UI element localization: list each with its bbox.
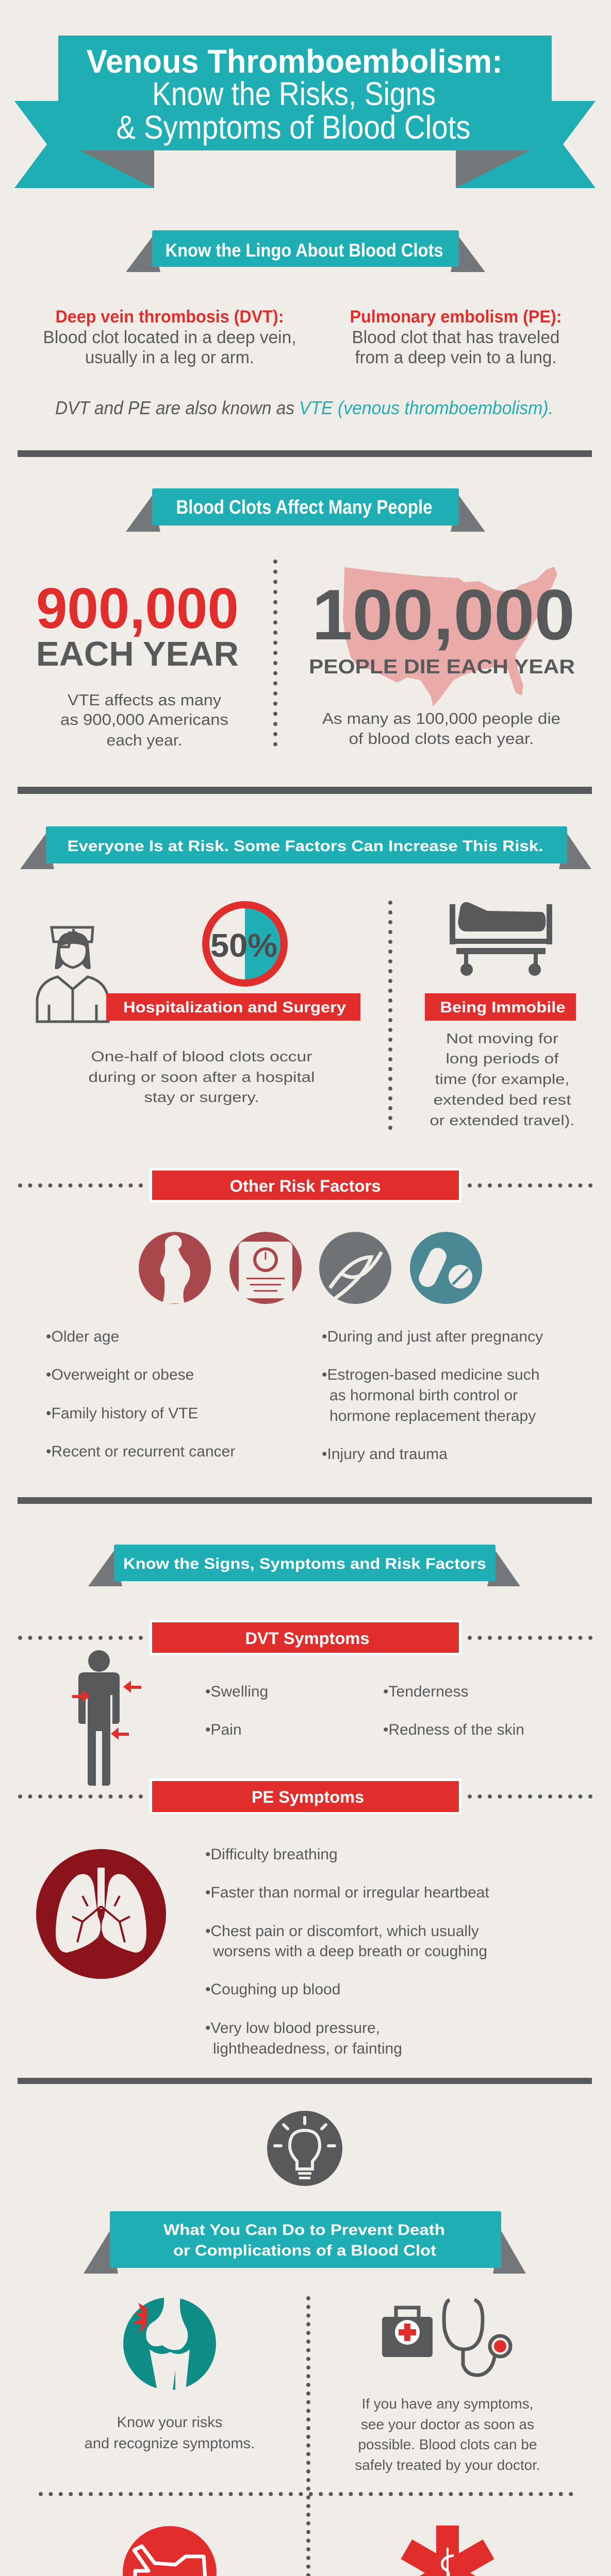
icon: human figure with arrows (72, 1650, 141, 1786)
banner: What You Can Do: or Complications of a Blood Clot (173, 2242, 436, 2259)
panel: being immobile: time (for example, (435, 1071, 569, 1087)
banner: Know the Signs: Know the Signs, Symptoms and Risk Factors (123, 1555, 486, 1572)
icon: 50% circle: 50% (210, 927, 277, 964)
stat: 100,000 with US map: 100,000 (312, 575, 575, 655)
list: DVT symptoms: •Tenderness (383, 1683, 469, 1700)
definition: PE: Pulmonary embolism (PE): (350, 307, 562, 327)
banner: Know the Lingo: Know the Lingo About Blood Clots (165, 240, 443, 261)
icon: pregnancy (139, 1232, 211, 1304)
icon: 50% circle (206, 905, 284, 983)
title ribbon (14, 36, 596, 188)
list: risk factors right (322, 1328, 543, 1463)
panel: see your doctor: possible. Blood clots can be (358, 2436, 537, 2452)
icon: hospital bed (123, 2526, 217, 2576)
icon: scale (229, 1232, 302, 1304)
icon: star of life (401, 2526, 494, 2576)
panel: tell your doctor (356, 2526, 539, 2576)
icon: pills (410, 1232, 482, 1304)
panel: see your doctor: see your doctor as soon as (361, 2416, 534, 2432)
icon: medical kit (382, 2308, 433, 2357)
VTE note: DVT and PE are also known as (55, 397, 294, 418)
label bar (425, 993, 576, 1021)
heading: PE Symptoms (20, 1778, 592, 1814)
icon: knee (123, 2297, 216, 2391)
list: DVT symptoms: •Pain (205, 1721, 242, 1738)
panel: hospitalization and surgery (37, 905, 360, 1105)
heading: DVT Symptoms: DVT Symptoms (245, 1629, 369, 1648)
list: PE symptoms: •Coughing up blood (205, 1981, 340, 1998)
title ribbon: & Symptoms of Blood Clots (117, 109, 470, 146)
panel: know your risks (85, 2297, 255, 2452)
icon: nurse (37, 927, 108, 1022)
icon: DNA (319, 1232, 391, 1304)
icon: US map (343, 567, 557, 706)
definition: DVT: Blood clot located in a deep vein, (43, 328, 296, 347)
definition: DVT: usually in a leg or arm. (85, 348, 254, 367)
heading: Other Risk Factors: Other Risk Factors (230, 1177, 381, 1195)
icon: bed (450, 902, 552, 976)
list: PE symptoms: worsens with a deep breath or coughing (212, 1943, 487, 1960)
list: PE symptoms: •Difficulty breathing (205, 1846, 338, 1863)
list: risk factors right: •Injury and trauma (322, 1446, 448, 1463)
banner: Know the Lingo (126, 230, 485, 272)
list: risk factors right: hormone replacement therapy (329, 1408, 536, 1425)
icons: risk factors (139, 1232, 482, 1304)
panel: being immobile: or extended travel). (430, 1112, 574, 1128)
title ribbon: Know the Risks, Signs (152, 75, 436, 112)
banner: Everyone Is at Risk (20, 826, 591, 869)
panel: hospitalization and surgery: stay or surgery. (144, 1089, 259, 1105)
stat: 900,000: each year. (106, 731, 183, 749)
panel: hospitalization and surgery: One-half of blood clots occur (91, 1048, 312, 1064)
banner: Blood Clots Affect Many People: Blood Clots Affect Many People (176, 497, 432, 518)
list: PE symptoms: •Chest pain or discomfort, which usually (205, 1923, 479, 1940)
list: risk factors left (46, 1328, 235, 1460)
heading: Other Risk Factors (20, 1168, 592, 1202)
icon: lungs (36, 1849, 166, 1979)
list: risk factors left: •Overweight or obese (46, 1366, 194, 1383)
stat: 100,000 with US map: PEOPLE DIE EACH YEAR (309, 656, 575, 678)
list: risk factors left: •Older age (46, 1328, 119, 1345)
panel: being immobile: Not moving for (446, 1030, 558, 1046)
panel: hospitalization and surgery: during or soon after a hospital (89, 1069, 315, 1085)
panel: being immobile: extended bed rest (433, 1092, 571, 1108)
panel: see your doctor (355, 2300, 540, 2473)
list: risk factors right: •During and just after pregnancy (322, 1328, 543, 1345)
banner: Know the Signs (88, 1545, 520, 1586)
stat: 900,000: VTE affects as many (68, 691, 222, 709)
banner: What You Can Do: What You Can Do to Prevent Death (163, 2222, 445, 2239)
label bar (106, 993, 360, 1021)
stat: 900,000: EACH YEAR (36, 635, 239, 673)
definition: DVT: Deep vein thrombosis (DVT): (56, 307, 284, 327)
stat: 100,000 with US map: As many as 100,000 people die (322, 709, 560, 727)
stat: 900,000 (36, 577, 239, 749)
list: PE symptoms: •Very low blood pressure, (205, 2020, 380, 2037)
list: PE symptoms (205, 1846, 489, 2057)
panel: know your risks: Know your risks (117, 2414, 222, 2431)
panel: before surgery (68, 2526, 271, 2576)
panel: being immobile (425, 902, 576, 1128)
list: DVT symptoms: •Redness of the skin (383, 1721, 524, 1738)
stat: 100,000 with US map: of blood clots each year. (349, 730, 534, 748)
definition: DVT (43, 307, 296, 367)
list: DVT symptoms: •Swelling (205, 1683, 268, 1700)
list: risk factors left: •Recent or recurrent cancer (46, 1443, 235, 1460)
banner: What You Can Do (84, 2211, 526, 2274)
VTE note: VTE (venous thromboembolism). (299, 397, 553, 418)
panel: know your risks: and recognize symptoms. (85, 2435, 255, 2452)
definition: PE: Blood clot that has traveled (352, 328, 560, 347)
list: risk factors right: as hormonal birth control or (329, 1387, 518, 1404)
label bar: Being Immobile (440, 999, 565, 1016)
stat: 100,000 with US map (309, 567, 575, 748)
icon: lightbulb (267, 2111, 342, 2186)
title ribbon: Venous Thromboembolism: (87, 43, 502, 80)
heading: PE Symptoms: PE Symptoms (252, 1788, 364, 1806)
definition: PE (350, 307, 562, 367)
panel: see your doctor: If you have any symptoms, (361, 2396, 534, 2412)
stat: 900,000: as 900,000 Americans (60, 710, 228, 728)
icon: stethoscope (444, 2300, 510, 2375)
banner: Everyone Is at Risk: Everyone Is at Risk. Some Factors Can Increase This Risk. (67, 838, 543, 855)
heading: DVT Symptoms (20, 1620, 592, 1655)
list: PE symptoms: lightheadedness, or fainting (213, 2040, 402, 2057)
list: PE symptoms: •Faster than normal or irregular heartbeat (205, 1884, 489, 1901)
panel: being immobile: long periods of (445, 1050, 559, 1066)
list: DVT symptoms (205, 1683, 524, 1738)
VTE note (55, 397, 553, 418)
definition: PE: from a deep vein to a lung. (355, 348, 557, 367)
list: risk factors right: •Estrogen-based medicine such (322, 1366, 539, 1383)
label bar: Hospitalization and Surgery (123, 999, 346, 1016)
stat: 900,000: 900,000 (36, 577, 239, 640)
list: risk factors left: •Family history of VTE (46, 1405, 199, 1422)
banner: Blood Clots Affect Many People (126, 488, 485, 532)
panel: see your doctor: safely treated by your doctor. (355, 2457, 540, 2473)
